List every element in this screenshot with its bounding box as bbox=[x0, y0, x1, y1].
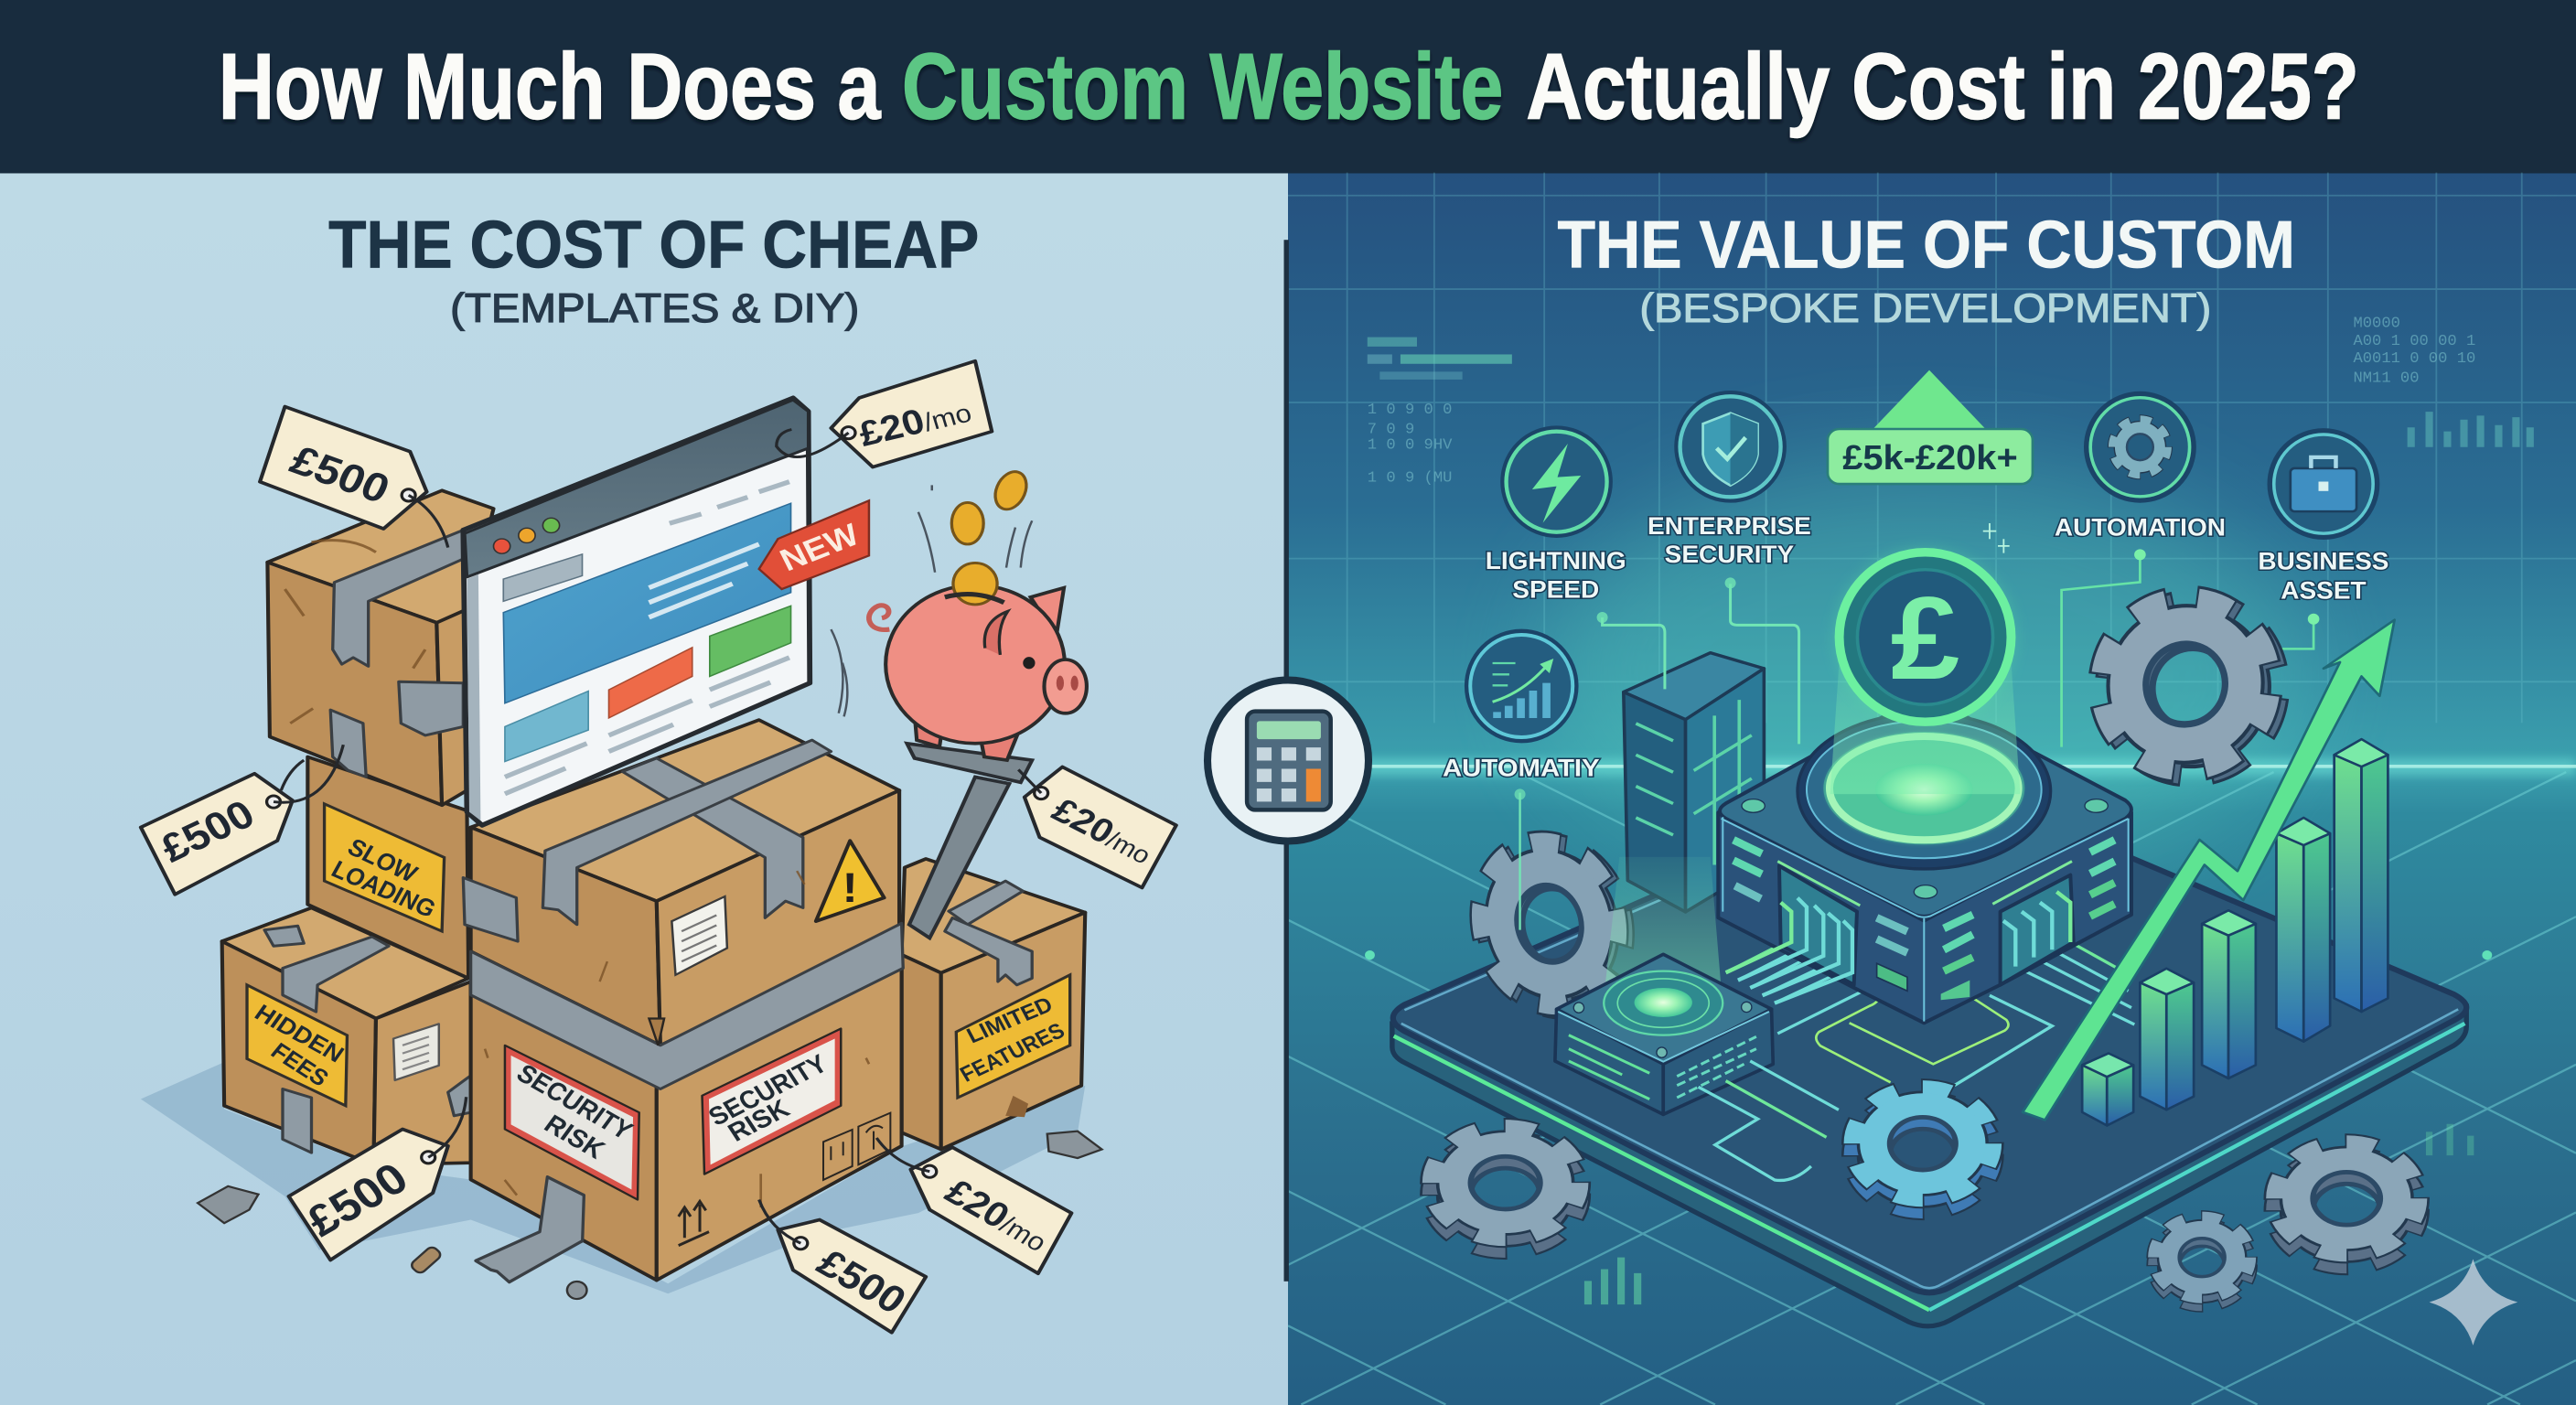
small chip box bbox=[1555, 954, 1773, 1114]
light beam above small chip bbox=[1603, 857, 1723, 1006]
illustration: custom platform bbox=[1365, 316, 2530, 1346]
bar 2 bbox=[2140, 969, 2194, 1110]
browser window bbox=[463, 398, 810, 825]
decorative data readouts: 1 0 0 9HV bbox=[1368, 437, 1452, 454]
icon: business asset briefcase bbox=[2270, 432, 2377, 537]
icon: lightning speed bbox=[1504, 429, 1609, 534]
gear: left mid bbox=[1466, 832, 1638, 1018]
chip output traces bbox=[1699, 1061, 1839, 1180]
label: security risk left bbox=[505, 1046, 639, 1200]
price tag: £500 top left: £500 bbox=[284, 436, 397, 512]
price tag: £20/mo top right: £20/mo bbox=[854, 390, 975, 454]
box: right small bbox=[902, 859, 1085, 1149]
decorative data readouts: 1 0 9 (MU bbox=[1368, 470, 1452, 487]
price tag: £20/mo top right bbox=[777, 361, 992, 467]
bar chart bbox=[2082, 739, 2388, 1125]
piggy bank bbox=[869, 563, 1087, 760]
label: hidden fees bbox=[247, 985, 349, 1106]
label: security risk right bbox=[703, 1028, 841, 1174]
ripped tape bbox=[476, 1177, 584, 1282]
gear: large upper right bbox=[2091, 590, 2287, 783]
background grid bbox=[1288, 173, 2576, 723]
floor grid bbox=[1288, 772, 2576, 1405]
icon: automation gear bbox=[2088, 394, 2193, 499]
heading: the cost of cheap: THE COST OF CHEAP bbox=[328, 207, 979, 283]
left column icons bbox=[1468, 394, 1783, 739]
label: hidden fees: HIDDEN bbox=[250, 1000, 349, 1067]
icon: calculator bbox=[1247, 712, 1331, 810]
floor shadow bbox=[141, 1062, 1085, 1293]
bar 4 bbox=[2276, 818, 2330, 1042]
subheading: bespoke development: (BESPOKE DEVELOPMENT) bbox=[1639, 284, 2211, 331]
scattered debris bbox=[198, 1132, 1101, 1299]
watermark sparkle bbox=[2430, 1259, 2517, 1346]
box: slow loading bbox=[307, 756, 468, 978]
handling marks and ripped tape bbox=[476, 1049, 890, 1282]
price badge: £5k-£20k+ bbox=[1842, 439, 2018, 477]
title text: How Much Does a bbox=[219, 33, 881, 138]
price tag: £500 middle left: £500 bbox=[153, 791, 263, 871]
building circuit fins bbox=[1726, 892, 2070, 1003]
label: business asset: ASSET bbox=[2281, 576, 2367, 604]
stand under piggy bank bbox=[907, 744, 1032, 938]
decorative data readouts: A00 1 00 00 1 bbox=[2353, 333, 2475, 350]
tape band around large box bbox=[471, 923, 903, 1089]
title text: Custom Website bbox=[902, 33, 1503, 138]
coins falling bbox=[831, 467, 1032, 716]
NEW tag bbox=[759, 500, 869, 589]
label: slow loading: SLOW bbox=[343, 832, 423, 887]
label: enterprise security: SECURITY bbox=[1665, 541, 1794, 568]
box: large lower bbox=[471, 968, 902, 1281]
calculator badge bbox=[1208, 681, 1368, 842]
NEW tag: NEW bbox=[774, 517, 864, 578]
price tag: £20/mo bottom right: £20/mo bbox=[938, 1171, 1057, 1259]
gear: center bottom bbox=[1853, 1089, 1991, 1211]
building wall vents bbox=[1733, 840, 2115, 971]
server tower bbox=[1624, 653, 1764, 912]
panel: the cost of cheap bbox=[0, 173, 1288, 1405]
warning triangle bbox=[816, 841, 885, 921]
pound coin bbox=[1836, 549, 2014, 725]
bar 5 bbox=[2334, 739, 2388, 1012]
decorative data readouts: 1 0 9 0 0 bbox=[1368, 402, 1452, 419]
pound coin: £ bbox=[1891, 573, 1959, 704]
label: security risk right: SECURITY bbox=[703, 1049, 832, 1132]
decorative data readouts: M0000 bbox=[2353, 316, 2400, 332]
label: hidden fees: FEES bbox=[266, 1038, 334, 1091]
price tag: £500 bottom left: £500 bbox=[297, 1153, 417, 1246]
price tag: £20/mo bottom right bbox=[876, 1138, 1071, 1273]
illustration: pile of cardboard boxes bbox=[141, 361, 1176, 1333]
circuit traces bbox=[1726, 894, 2134, 1086]
sparkles bbox=[1983, 523, 2010, 553]
label: enterprise security: ENTERPRISE bbox=[1648, 512, 1811, 540]
icon: enterprise security bbox=[1678, 394, 1783, 499]
box: large upper bbox=[463, 720, 899, 1046]
bar 3 bbox=[2202, 910, 2256, 1078]
price tag: £500 top left bbox=[260, 407, 448, 548]
warning triangle: ! bbox=[843, 865, 858, 911]
light beam above building bbox=[1830, 614, 2020, 794]
label: lightning speed bbox=[1486, 546, 1626, 603]
label: security risk left: RISK bbox=[539, 1110, 610, 1164]
central glow bbox=[1544, 460, 2300, 887]
gear: small bottom bbox=[2154, 1217, 2249, 1305]
label: lightning speed: LIGHTNING bbox=[1486, 546, 1626, 574]
price tag: £500 middle left bbox=[141, 745, 343, 895]
subheading: templates and DIY: (TEMPLATES & DIY) bbox=[450, 284, 859, 331]
building ring dock bbox=[1798, 713, 2051, 869]
label: slow loading: LOADING bbox=[327, 854, 441, 923]
label: limited features: FEATURES bbox=[956, 1018, 1069, 1087]
horizon glow bbox=[1288, 759, 2576, 776]
platform base bbox=[1392, 779, 2466, 1326]
shipping note bbox=[671, 896, 727, 975]
panel: the value of custom bbox=[1288, 173, 2576, 1405]
price tag: £20/mo right of stand: £20/mo bbox=[1045, 791, 1160, 872]
icon: growth chart bbox=[1468, 633, 1575, 739]
price badge arrow bbox=[1872, 370, 1987, 431]
title bar bbox=[0, 0, 2576, 173]
label: automatiy: AUTOMATIY bbox=[1443, 754, 1600, 781]
label: business asset: BUSINESS bbox=[2258, 547, 2388, 575]
label: lightning speed: SPEED bbox=[1512, 575, 1599, 603]
label: limited features: LIMITED bbox=[963, 992, 1057, 1048]
box: top left bbox=[267, 490, 493, 805]
decorative data readouts: 7 0 9 bbox=[1368, 422, 1414, 438]
right connector lines bbox=[1365, 549, 2492, 960]
label: business asset bbox=[2258, 547, 2388, 604]
label: security risk right: RISK bbox=[723, 1094, 795, 1147]
box: hidden fees bbox=[222, 907, 471, 1164]
label: automation: AUTOMATION bbox=[2055, 513, 2226, 542]
arrows mark bbox=[679, 1113, 890, 1246]
gear: bottom right bbox=[2276, 1143, 2417, 1266]
connector lines bbox=[1515, 577, 1799, 930]
traces around building bbox=[1726, 894, 2134, 1086]
price tag: £500 bottom bbox=[759, 1200, 926, 1333]
decorative data readouts: NM11 00 bbox=[2353, 370, 2420, 387]
heading: the value of custom: THE VALUE OF CUSTOM bbox=[1558, 207, 2295, 283]
label: limited features bbox=[956, 975, 1070, 1098]
decorative data readouts bbox=[1368, 316, 2530, 1304]
gear: bottom left bbox=[1433, 1128, 1578, 1249]
center divider bbox=[1284, 240, 1289, 1282]
label: enterprise security bbox=[1648, 512, 1811, 568]
price tag: £500 bottom: £500 bbox=[809, 1241, 914, 1322]
decorative data readouts: A0011 0 00 10 bbox=[2353, 350, 2475, 368]
bar 1 bbox=[2082, 1053, 2133, 1125]
label: security risk left: SECURITY bbox=[511, 1059, 638, 1145]
price badge bbox=[1828, 429, 2033, 484]
price tag: £20/mo right of stand bbox=[1018, 767, 1176, 887]
price tag: £500 bottom left bbox=[289, 1097, 467, 1260]
label: slow loading bbox=[325, 804, 445, 931]
central building bbox=[1718, 700, 2131, 1023]
title text bbox=[219, 33, 2359, 138]
growth arrow bbox=[2023, 620, 2395, 1120]
title text: Actually Cost in 2025? bbox=[1526, 33, 2359, 138]
